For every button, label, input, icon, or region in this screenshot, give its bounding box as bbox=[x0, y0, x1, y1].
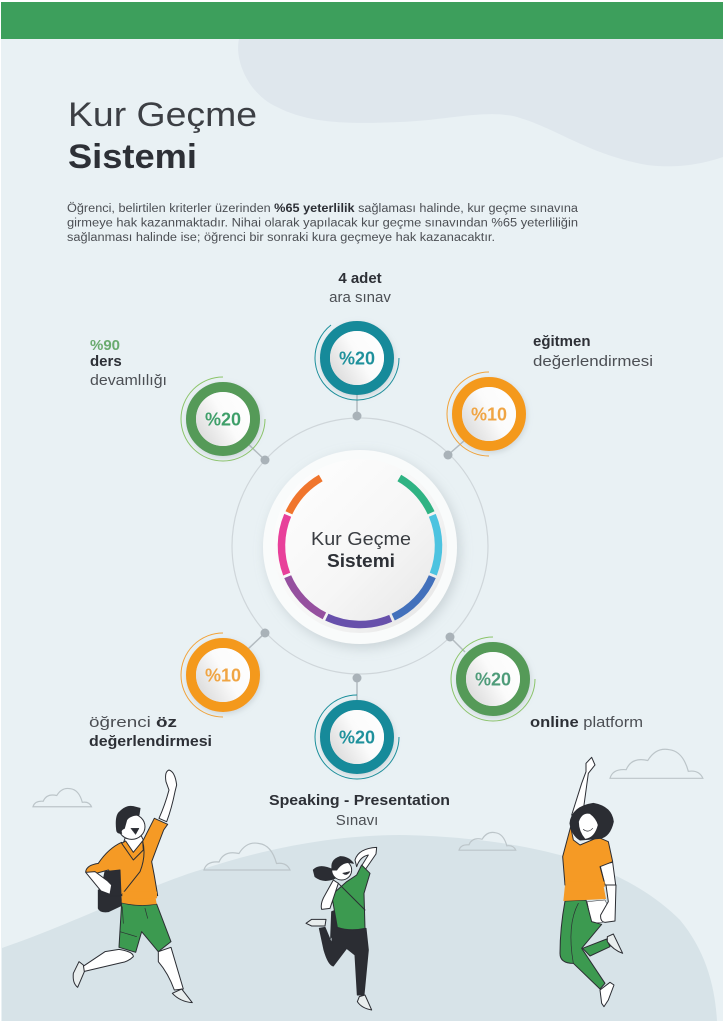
label: 4 adet ara sinav: ara sınav bbox=[329, 289, 391, 306]
central disc bbox=[263, 450, 457, 644]
label: %90 ders devamliligi bbox=[90, 337, 167, 389]
badge: left green 20 bbox=[181, 377, 265, 461]
badge: bottom teal 20: %20 bbox=[339, 728, 375, 748]
label: speaking presentation sinavi: Sınavı bbox=[336, 812, 378, 829]
background blob top right bbox=[238, 39, 723, 166]
label: egitmen degerlendirmesi: değerlendirmesi bbox=[533, 353, 653, 370]
connectors and node dots bbox=[247, 395, 465, 700]
label: speaking presentation sinavi: Speaking - Presentation bbox=[269, 792, 450, 809]
intro paragraph bbox=[67, 203, 579, 244]
badge: lower right green 20 bbox=[451, 637, 535, 721]
badge: bottom teal 20 bbox=[315, 695, 399, 779]
title: Kur Geçme bbox=[68, 96, 257, 134]
badge: right orange 10 bbox=[447, 372, 521, 456]
badge: left green 20: %20 bbox=[205, 410, 241, 430]
label: %90 ders devamliligi: %90 bbox=[90, 337, 120, 354]
label: egitmen degerlendirmesi bbox=[533, 333, 653, 370]
illustration: jumping man bbox=[73, 770, 192, 1003]
clouds bbox=[33, 749, 703, 870]
badge: lower left orange 10 bbox=[181, 633, 255, 717]
title bbox=[68, 96, 257, 176]
header bar bbox=[1, 2, 723, 39]
intro paragraph: Öğrenci, belirtilen kriterler üzerinden %65 yeterlilik sağlaması halinde, kur geçme sınavına bbox=[67, 203, 579, 215]
badge: lower left orange 10: %10 bbox=[205, 666, 241, 686]
label: 4 adet ara sinav bbox=[329, 270, 391, 306]
label: 4 adet ara sinav: 4 adet bbox=[338, 270, 382, 287]
intro paragraph: sağlanması halinde ise; öğrenci bir sonraki kura geçmeye hak kazanacaktır. bbox=[67, 232, 495, 244]
central disc: Sistemi bbox=[327, 551, 395, 571]
badge: top teal 20 bbox=[315, 325, 399, 400]
segmented colour ring bbox=[281, 478, 439, 625]
illustration: woman with phone bbox=[306, 847, 377, 1010]
background hill bbox=[2, 835, 717, 1021]
title: Sistemi bbox=[68, 138, 197, 176]
label: %90 ders devamliligi: ders bbox=[90, 353, 122, 370]
intro paragraph: girmeye hak kazanmaktadır. Nihai olarak yapılacak kur geçme sınavından %65 yeterliliğin bbox=[67, 218, 578, 230]
label: egitmen degerlendirmesi: eğitmen bbox=[533, 333, 591, 350]
label: %90 ders devamliligi: devamlılığı bbox=[90, 372, 167, 389]
badge: right orange 10: %10 bbox=[471, 404, 507, 424]
label: online platform: online platform bbox=[530, 714, 643, 731]
badge: top teal 20: %20 bbox=[339, 348, 375, 368]
label: ogrenci oz degerlendirmesi bbox=[89, 714, 212, 750]
illustration: jumping woman with book bbox=[560, 757, 623, 1007]
label: ogrenci oz degerlendirmesi: öğrenci öz bbox=[89, 714, 177, 731]
outer orbit ring bbox=[232, 418, 488, 674]
badge: lower right green 20: %20 bbox=[475, 670, 511, 690]
central label: Kur Geçme bbox=[311, 529, 411, 549]
label: ogrenci oz degerlendirmesi: değerlendirmesi bbox=[89, 733, 212, 750]
label: speaking presentation sinavi bbox=[269, 792, 450, 829]
